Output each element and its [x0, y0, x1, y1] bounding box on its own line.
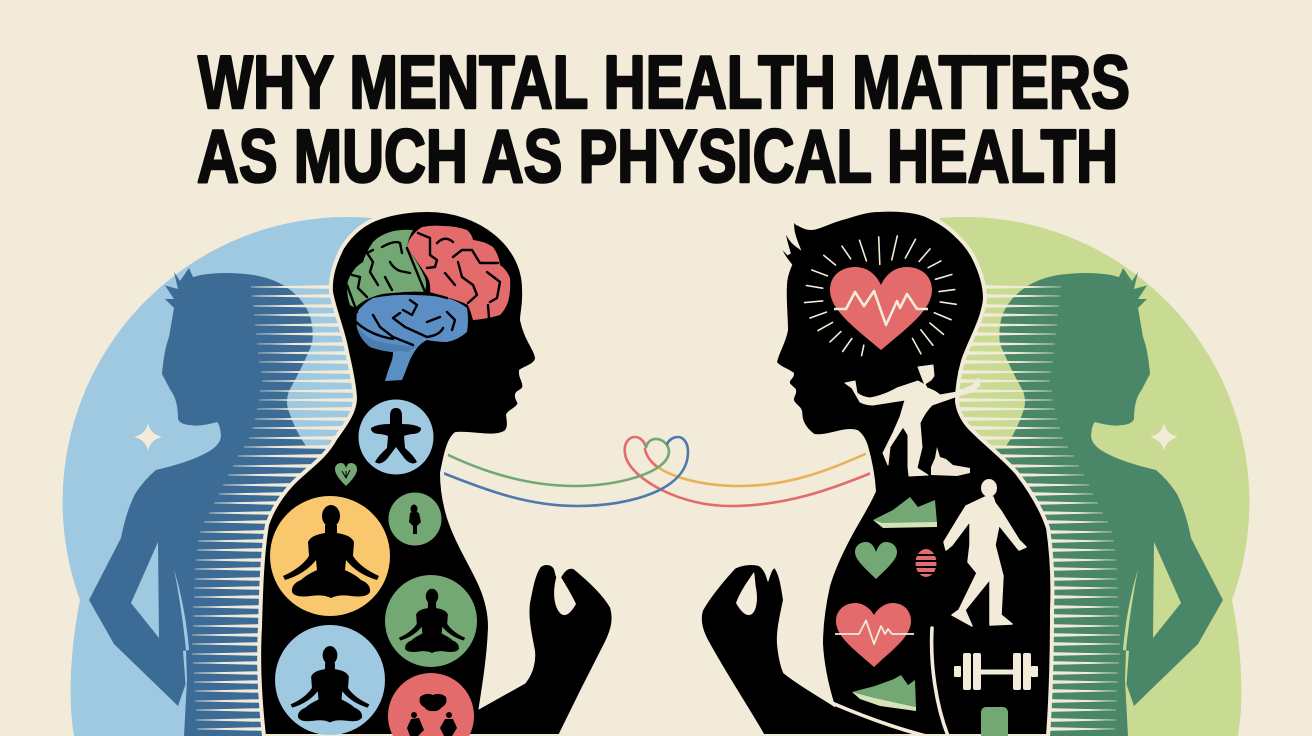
right fist notch	[736, 572, 757, 615]
circle: yellow meditation	[270, 496, 390, 616]
green shadow details	[1123, 542, 1181, 690]
green circle backdrop	[940, 217, 1249, 736]
left black figure: mind	[259, 210, 614, 736]
icon: red heart with ECG	[835, 603, 914, 667]
circle: green meditation	[385, 575, 477, 667]
icon: cream shoe	[931, 447, 970, 476]
title	[197, 40, 1130, 198]
star right	[1150, 423, 1178, 451]
brain folds	[347, 233, 500, 345]
icon: dancing figure	[845, 365, 980, 476]
icon: big heart with ECG	[830, 267, 932, 350]
blue shadow silhouette	[89, 268, 330, 736]
icon: green shoe lower	[852, 675, 916, 711]
right black figure: body	[700, 210, 1052, 736]
icon: green block	[981, 707, 1008, 736]
star left	[134, 423, 162, 451]
green shadow silhouette	[982, 268, 1223, 736]
icon: walking figure	[944, 479, 1026, 626]
circle: red	[388, 673, 474, 736]
icon: dumbbell	[954, 653, 1038, 690]
blue circle backdrop	[63, 217, 372, 736]
connecting lines	[438, 437, 876, 506]
green side stripes	[945, 285, 1120, 731]
heart rays	[804, 236, 956, 356]
circle: small green	[388, 492, 442, 546]
blue shadow details	[131, 542, 189, 690]
icon: small green heart	[335, 463, 357, 486]
brain	[347, 226, 510, 381]
brain green lobe	[347, 230, 426, 308]
left fist notch	[554, 572, 576, 615]
blue side stripes	[192, 285, 367, 731]
circle: top blue	[358, 400, 434, 474]
icon: striped ball	[914, 549, 938, 577]
circle: blue meditation	[275, 625, 385, 735]
brain red lobe	[407, 226, 510, 320]
arm and spine lines	[832, 628, 948, 736]
brain lower shade	[357, 326, 417, 352]
icon: green heart	[855, 542, 897, 579]
icon: green shoe	[873, 497, 937, 528]
brain blue lobe	[356, 295, 468, 381]
